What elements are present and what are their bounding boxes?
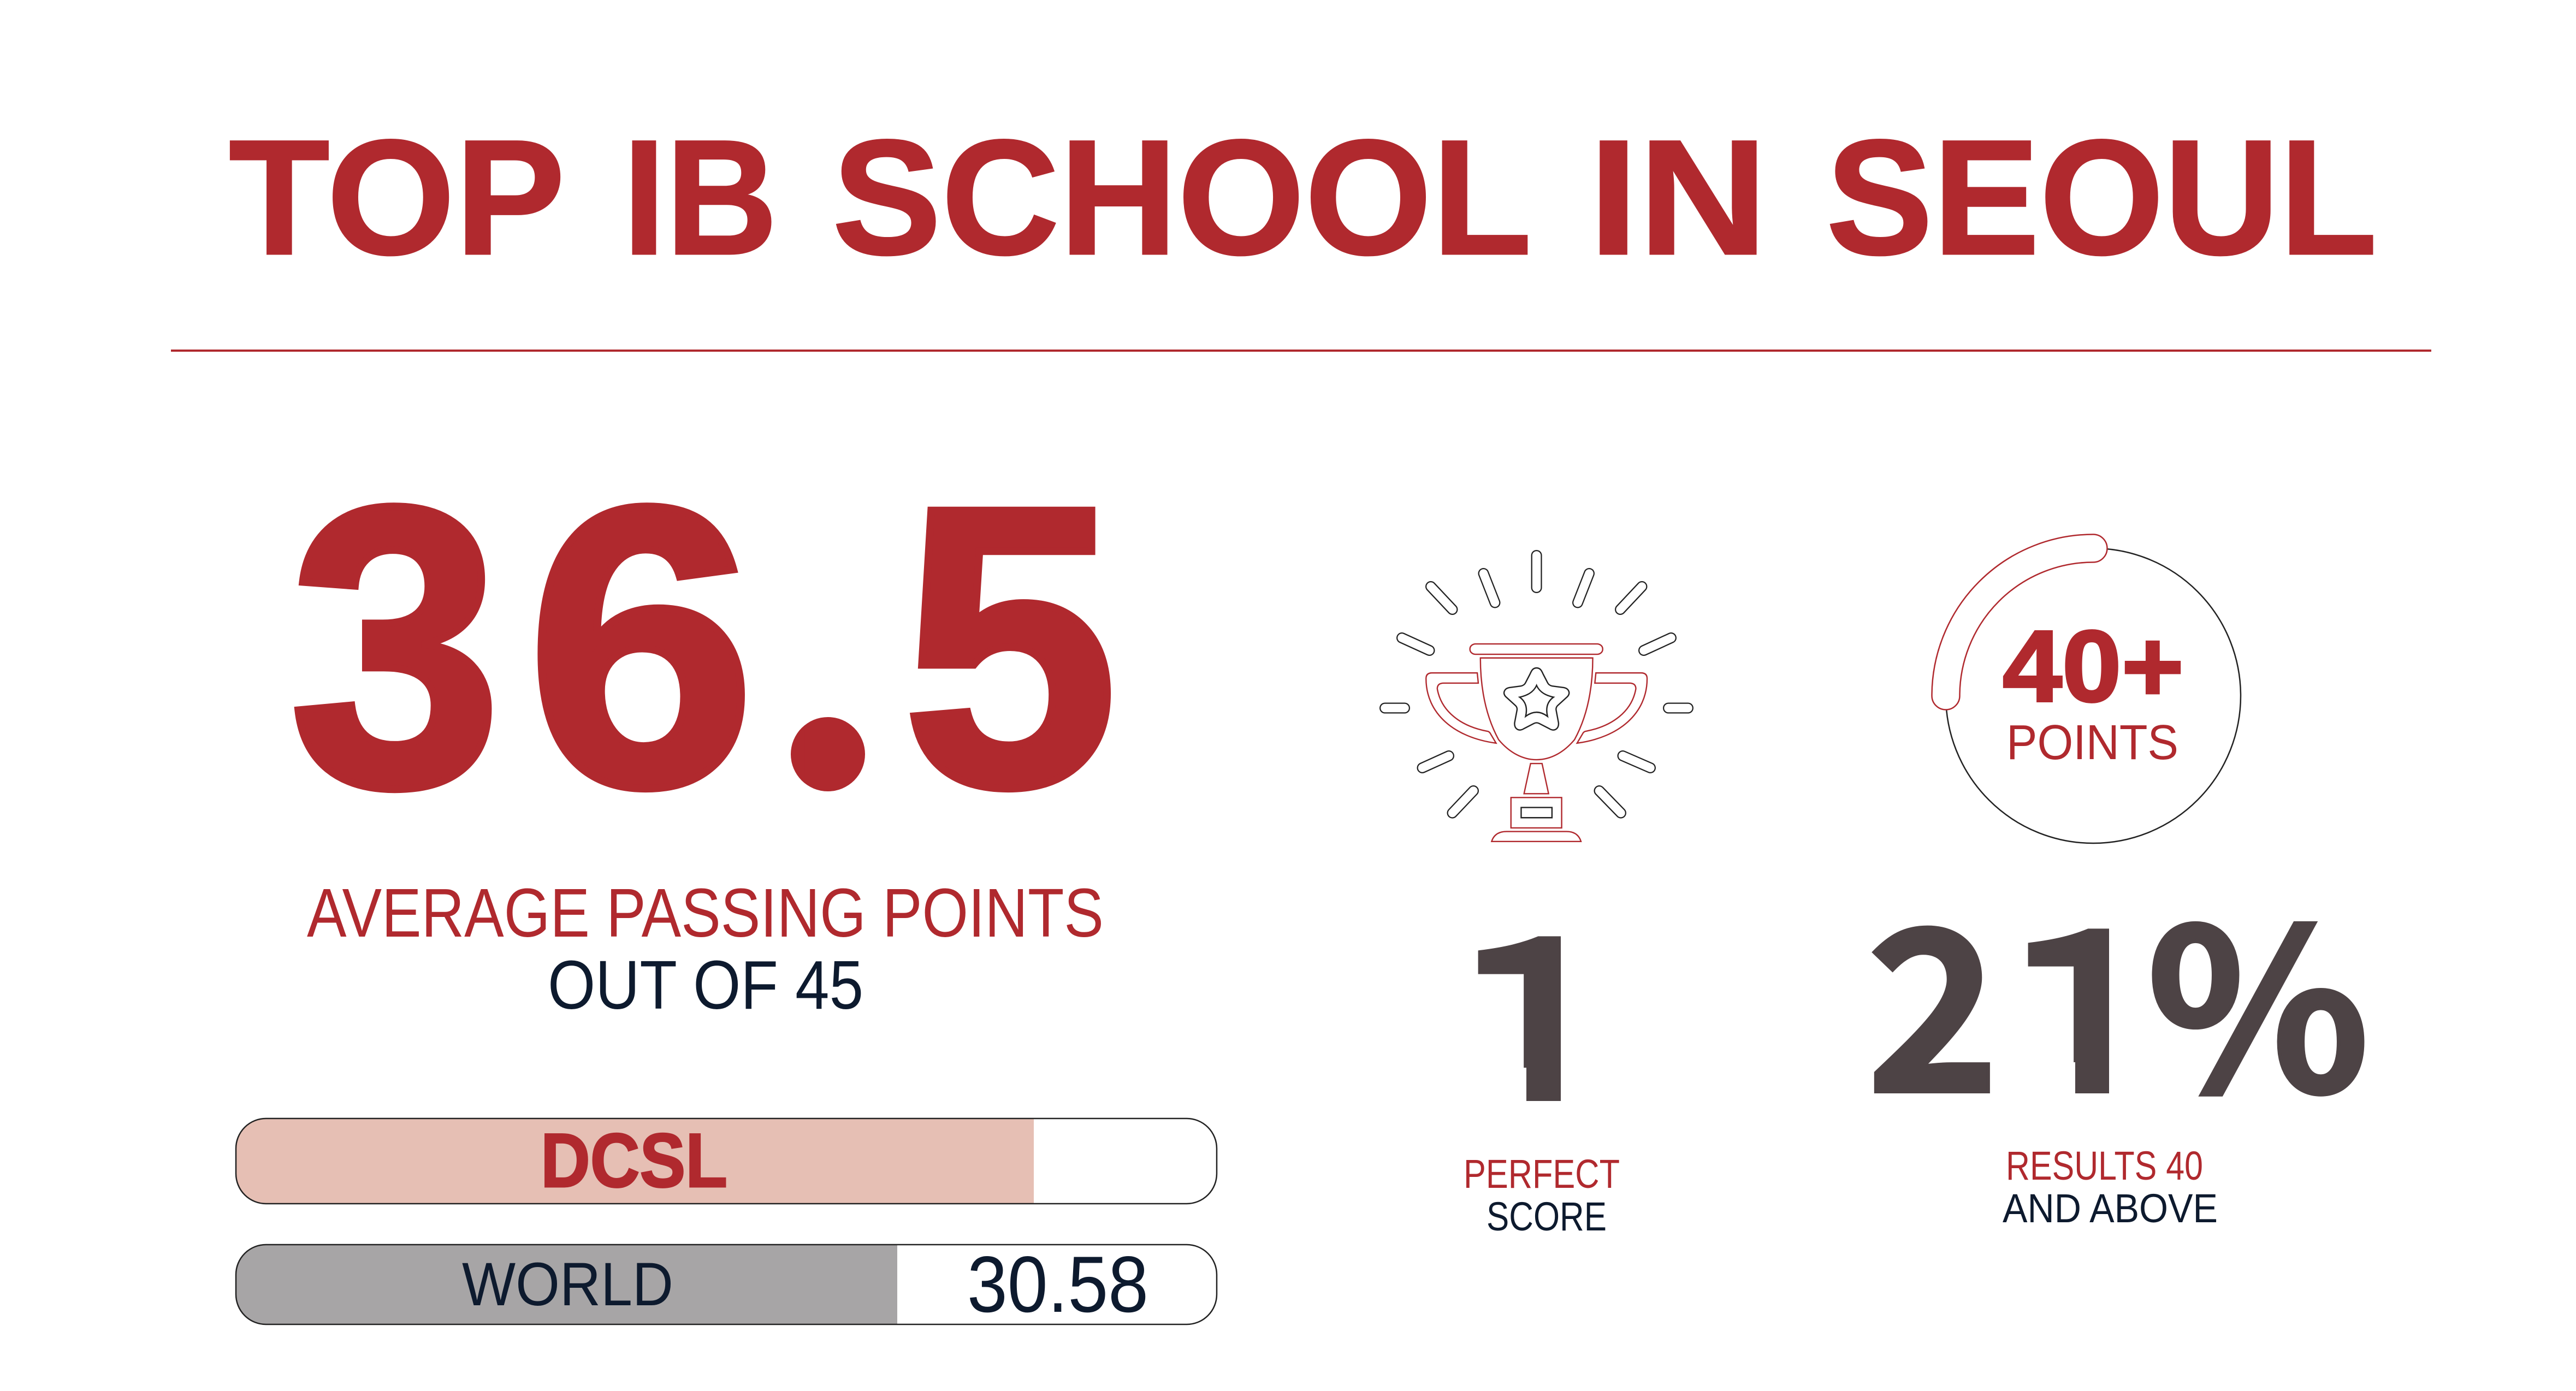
title [229,105,2377,289]
bar value: 30.58: 30.58 [967,1240,1148,1329]
title: IN [1589,105,1768,289]
number 21% [1866,832,2370,1157]
bar: world [236,1240,1217,1329]
caption: average passing points: AVERAGE PASSING POINTS [307,874,1104,951]
big number 36.5: 5 [902,424,1118,869]
caption: results 40: RESULTS 40 [2006,1143,2203,1188]
big number 36.5: 3 [289,424,502,869]
number 21%: % [2146,832,2370,1157]
chart: 40+ points radial gauge [1932,534,2241,843]
icon: trophy [1385,555,1688,842]
stat: perfect score [1436,840,1670,1239]
big number 36.5 [289,424,1118,869]
stat: 21 percent [1866,832,2370,1231]
bar: DCSL [236,1117,1217,1204]
caption: out of 45: OUT OF 45 [548,946,863,1023]
big number 36.5: . [783,481,874,847]
title: TOP [229,105,565,289]
gauge label: POINTS [2006,715,2178,770]
gauge value: 40+ [2003,610,2184,723]
big number 36.5: 6 [526,424,756,869]
caption: and above: AND ABOVE [2003,1186,2218,1231]
title: SEOUL [1826,105,2377,289]
number 21%: 2 [1866,832,2000,1157]
number 21%: 1 [1994,832,2194,1157]
title: SCHOOL [832,105,1532,289]
caption: score: SCORE [1487,1194,1607,1239]
bar label: DCSL: DCSL [541,1117,727,1203]
number 1 [1436,840,1670,1164]
caption: perfect: PERFECT [1464,1151,1620,1197]
panel: average passing points [289,424,1118,1023]
title: IB [623,105,778,289]
number 1: 1 [1444,840,1644,1164]
trophy body [1426,644,1647,842]
trophy rays [1385,555,1688,813]
bar label: world: WORLD [462,1250,673,1318]
